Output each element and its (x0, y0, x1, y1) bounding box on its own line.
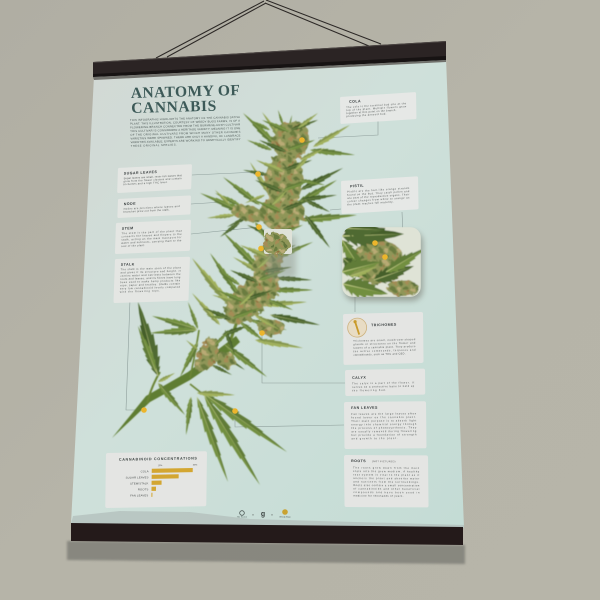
panel: roots (344, 455, 429, 507)
panel: stalk: carries water and nutrients between the (120, 273, 181, 278)
panel: stem: water and nutrients, carrying them to the (121, 239, 182, 245)
poster sheet (71, 58, 464, 528)
panel: stem: rest of the plant. (121, 244, 146, 248)
panel: fan leaves: found lower on the cannabis plant. (351, 416, 416, 419)
title (131, 82, 240, 117)
panel: roots: ROOTS (351, 459, 366, 463)
panel: pistil: found on the bud. They catch pollen and (347, 190, 410, 197)
panel: trichomes: glands or structures on the flower and (353, 342, 416, 346)
panel: node (117, 195, 191, 218)
pistil dots (372, 240, 378, 246)
panel: node: branches grow out from the stalk. (123, 208, 170, 214)
panel: stem: The stem is the part of the plant that (122, 230, 182, 235)
logo: right: Weedy Bugs (279, 516, 291, 518)
stalk and stems (112, 140, 292, 438)
panel: calyx: CALYX (352, 376, 366, 380)
panel: trichomes: leaves of a cannabis plant. They produce (353, 345, 416, 350)
panel: fan leaves: are usually removed during flowering (351, 430, 417, 433)
callout dots (141, 137, 305, 414)
axis labels (158, 464, 197, 467)
top rail (93, 41, 446, 80)
leader lines (126, 120, 404, 427)
title: CANNABIS (131, 98, 216, 117)
panel: cola: COLA (349, 99, 361, 104)
intro text block: THIS INFOGRAPHIC HIGHLIGHTS THE ANATOMY OF THE CANNABIS SATIVA (130, 115, 240, 122)
footer logos: x (252, 512, 254, 516)
panel: roots: anchors the plant and absorbs water (353, 477, 419, 480)
interior leaves crossing the buds (203, 117, 319, 338)
panel: stalk: been used to make hemp products like (120, 279, 181, 284)
poster lower shading (71, 511, 464, 528)
short sugar leaves over buds (185, 110, 331, 377)
panel: calyx (345, 369, 425, 396)
panel: roots: medicine for thousands of years. (353, 495, 404, 498)
footer logos (237, 509, 291, 518)
panel: trichomes (343, 312, 424, 365)
panel: trichomes: Trichomes are small, mushroom-shaped (353, 338, 416, 343)
intro text block (130, 115, 241, 148)
panel: sugar leaves: trichomes and a high THC level. (123, 181, 168, 186)
pistil bud (351, 240, 405, 284)
panel: roots: root system is vital to the plant as it (353, 474, 420, 477)
panel: node: NODE (124, 202, 136, 206)
panel: fan leaves: the process of photosynthesis. They (351, 426, 417, 430)
footer logos: x (271, 512, 273, 516)
panel: calyx: The calyx is a part of the flower. It (352, 381, 414, 385)
panel: pistil: Pistils are the hair-like orange strands (347, 187, 410, 194)
bar: roots: ROOTS (138, 487, 149, 491)
logo: centre: g (261, 511, 265, 518)
panel: sugar leaves: Sugar leaves are small, resin-rich leaves that (124, 174, 182, 180)
panel: cola: together at this point on the branch, (346, 109, 397, 115)
hanging cord (156, 0, 381, 58)
bar: fan leaves: FAN LEAVES (130, 493, 148, 498)
panel: roots: of cannabinoids and other beneficial (353, 488, 420, 491)
panel: fan leaves (344, 401, 426, 449)
panel: cola: top of the plant. Multiple flowers grow (346, 105, 406, 112)
panel: calyx: the flowering bud. (352, 389, 387, 392)
fan leaves lower (155, 371, 290, 488)
panel: trichomes: the active compounds, terpenes and (353, 349, 416, 353)
panel: pistil: are part of the reproductive organs. Their (347, 193, 409, 200)
plant illustration (112, 110, 357, 488)
panel: roots: The roots grow down from the main (353, 467, 420, 470)
panel: trichomes: TRICHOMES (371, 323, 397, 327)
axis labels: 30% (193, 464, 197, 466)
panel: stalk: STALK (121, 262, 135, 267)
panel: pistil (341, 176, 419, 214)
intro text block: VARIETIES WERE SPAWNED. THERE ARE ONLY A HANDFUL OF LANDRACE (130, 133, 241, 140)
bar: cola: COLA (141, 469, 149, 473)
panel: sugar leaves: grow from the flower clusters and contain (123, 177, 182, 183)
panel: sugar leaves: SUGAR LEAVES (124, 170, 157, 176)
panel: roots: Roots also contain a small concentration (353, 484, 420, 487)
panel: fan leaves: Their main purpose is to absorb light (351, 419, 417, 423)
icon: trichome magnifier (348, 318, 367, 337)
panel: pistil: colour changes from white to orange as (347, 196, 410, 203)
panel: fan leaves: energy into chemical energy through (351, 423, 417, 426)
panel: calyx: serves as a protective base to hold up (352, 385, 415, 389)
panel: sugar leaves (117, 164, 192, 193)
intro text block: THIS CULTIVAR IS CONSIDERED A HERITAGE VARIETY, MEANING IT IS ONE (130, 126, 240, 133)
panel: stalk: very low cannabinoid levels compared (120, 286, 181, 291)
panel: roots: (NOT PICTURED) (372, 460, 396, 463)
buds (190, 114, 316, 376)
intro text block: THESE ORIGINAL SPECIES. (131, 143, 177, 148)
intro text block: OF THE ORIGINAL CULTIVARS FROM WHICH MANY OTHER CANNABIS (130, 130, 241, 137)
panel: roots: compounds and have been used in (353, 491, 420, 494)
intro text block: PLANT. THIS ILLUSTRATION, COURTESY OF WEEDY BUGS FARMS, IS OF A (130, 119, 240, 126)
panel: stalk: The stalk is the main stem of the plant (121, 266, 181, 271)
panel: stalk: roots and leaves, and its fibres have long (120, 276, 181, 281)
fan leaves upper left (131, 300, 201, 378)
axis labels: 10% (158, 465, 162, 467)
bar: stem/stalk: STEM/STALK (130, 481, 149, 486)
magnified pistil image (341, 227, 426, 304)
panel: stem: STEM (122, 226, 134, 231)
panel: cola (340, 92, 416, 124)
panel: stalk: with the flowering tops. (120, 289, 160, 294)
panel: trichomes: cannabinoids, such as THC and CBD. (353, 352, 406, 357)
panel: stem: stalk, acting as the main transport for (121, 236, 182, 242)
panel: stalk (113, 257, 190, 303)
title: ANATOMY OF (131, 82, 240, 102)
panel: cola: producing the densest bud. (346, 112, 387, 118)
panel: stalk: and gives it its structure and height. It (120, 270, 181, 275)
shadow under bottom rail (67, 541, 465, 564)
bottom rail (71, 523, 463, 545)
panel: fan leaves: but provide a foundation of strength (351, 433, 417, 437)
panel: roots: and nutrients from the surroundings. (353, 481, 420, 484)
panel: node: Nodes are junctions where leaves and (124, 205, 180, 211)
bar: sugar leaves: SUGAR LEAVES (126, 475, 149, 480)
panel: stalk: rope, paper and textiles. Stalks contain (120, 282, 181, 287)
panel: pistil: the plant reaches full maturity. (347, 201, 394, 206)
panel: fan leaves: FAN LEAVES (351, 406, 378, 410)
panel: fan leaves: Fan leaves are the large leaves often (351, 412, 417, 416)
panel: stem (115, 220, 191, 254)
intro text block: VARIETIES AVAILABLE; EXPERTS ARE WORKING TO GENETICALLY IDENTIFY (131, 137, 241, 144)
panel: cola: The cola is the terminal bud site at the (346, 102, 407, 109)
panel: pistil: PISTIL (350, 184, 364, 188)
logo: left: The Source (237, 516, 248, 518)
panel: fan leaves: and growth to the plant. (351, 437, 398, 440)
panel: cannabinoid concentrations chart: CANNABINOID CONCENTRATIONS (119, 456, 197, 462)
panel: cannabinoid concentrations chart (105, 451, 207, 508)
panel: stem: connects the leaves and flowers to the (121, 233, 182, 238)
panel: roots: stalk into the grow medium. A healthy (353, 470, 420, 473)
magnified node inset (263, 229, 296, 278)
intro text block: FLOWERING BRANCH CONNECTED FROM THE BURMESE-KUSH CULTIVAR (130, 122, 240, 129)
long sugar leaves (189, 110, 357, 380)
